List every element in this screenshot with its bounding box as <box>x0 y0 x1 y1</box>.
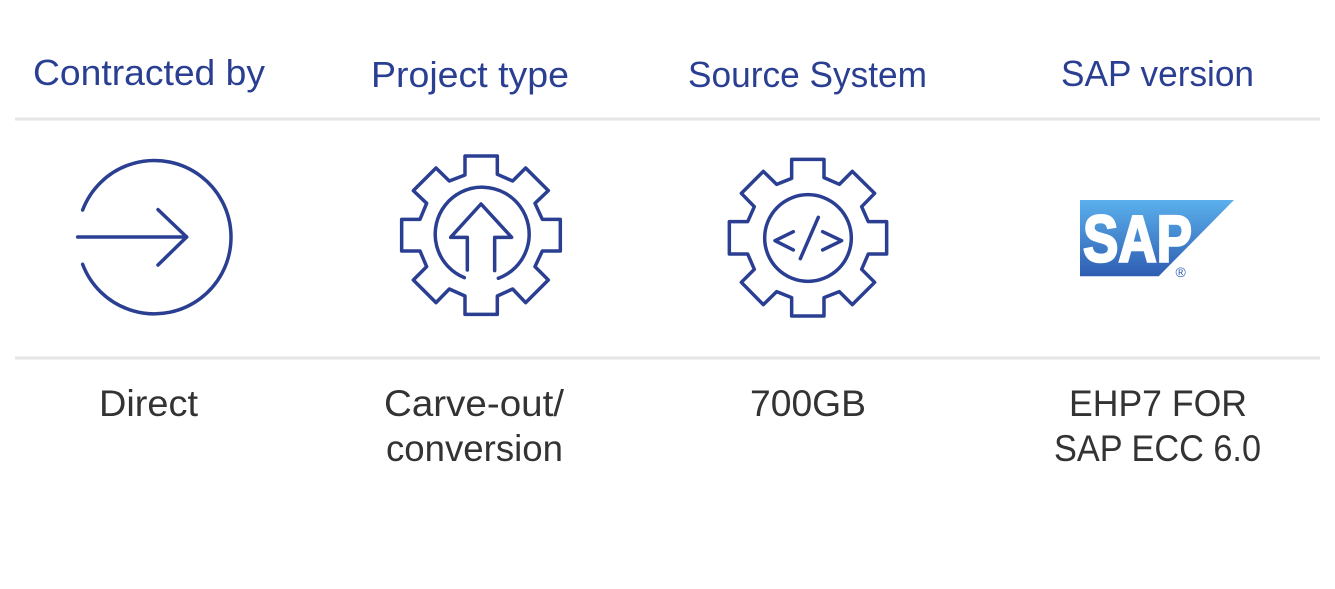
value: Direct: Direct <box>99 383 199 424</box>
value: EHP7 FOR SAP ECC 6.0: EHP7 FOR <box>1069 383 1247 424</box>
icon: SAP logo: ® <box>1176 264 1187 280</box>
heading: Project type: Project type <box>371 54 569 95</box>
icon: circled arrow entering <box>78 160 231 314</box>
value: EHP7 FOR SAP ECC 6.0: SAP ECC 6.0 <box>1054 428 1261 469</box>
value: EHP7 FOR SAP ECC 6.0 <box>1054 383 1261 469</box>
icon: gear with code brackets <box>729 159 887 316</box>
icon: SAP logo: SAP <box>1083 202 1192 276</box>
value: 700GB: 700GB <box>750 383 866 424</box>
heading: Contracted by: Contracted by <box>33 52 265 93</box>
value: Carve-out/ conversion: Carve-out/ <box>384 383 565 424</box>
value: Carve-out/ conversion <box>384 383 565 469</box>
heading: SAP version: SAP version <box>1061 53 1254 94</box>
icon: gear with up arrow <box>402 156 560 314</box>
heading: Source System: Source System <box>688 54 927 95</box>
value: Carve-out/ conversion: conversion <box>386 428 563 469</box>
